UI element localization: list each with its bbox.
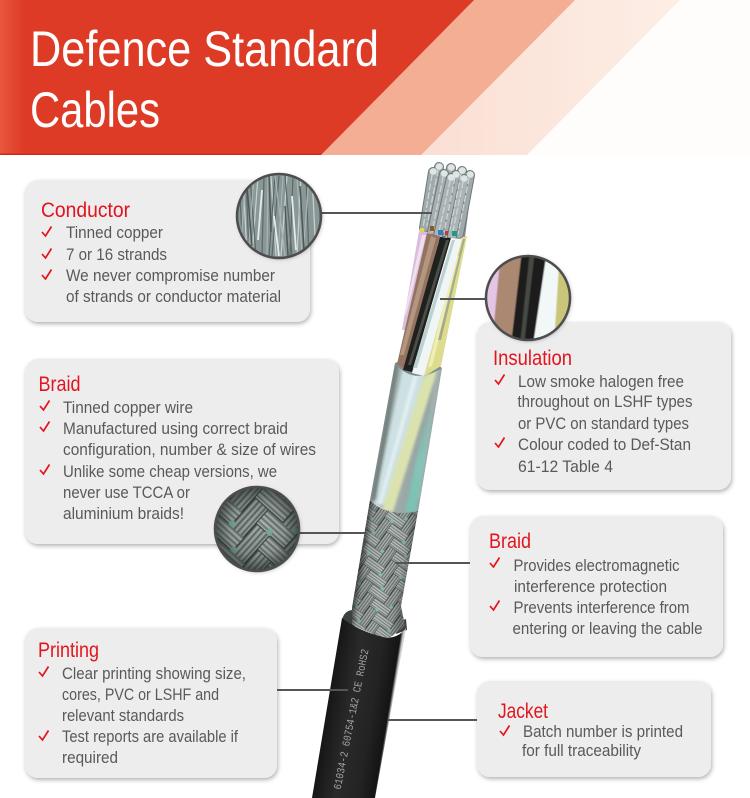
list: conductor points: 7 or 16 strands bbox=[66, 245, 167, 264]
list: printing points: Test reports are available if bbox=[62, 727, 238, 746]
list: braid right points bbox=[490, 556, 702, 638]
cable illustration bbox=[312, 166, 473, 798]
screen foil bbox=[370, 363, 442, 513]
icon: insulation magnifier bbox=[484, 254, 574, 344]
list: insulation points bbox=[495, 372, 692, 476]
heading: braid left: Braid bbox=[38, 373, 80, 396]
cable jacket with printing bbox=[312, 618, 406, 798]
list: braid left points: Tinned copper wire bbox=[63, 398, 193, 417]
list: jacket points bbox=[500, 722, 683, 760]
panel: insulation bbox=[477, 322, 731, 490]
title: Defence Standard bbox=[30, 21, 379, 77]
panel: conductor bbox=[25, 180, 310, 322]
title bbox=[30, 21, 379, 138]
heading: conductor: Conductor bbox=[41, 199, 130, 222]
list: jacket points: Batch number is printed bbox=[523, 722, 683, 741]
back of screen foil bbox=[395, 359, 442, 380]
list: braid left points: configuration, number & size of wires bbox=[63, 440, 316, 459]
list: insulation points: throughout on LSHF types bbox=[518, 392, 692, 411]
list: braid right points: Prevents interference from bbox=[514, 598, 690, 617]
list: conductor points bbox=[42, 223, 281, 306]
header banner bbox=[0, 0, 750, 155]
list: printing points bbox=[39, 664, 246, 767]
list: insulation points: Colour coded to Def-Stan bbox=[518, 435, 691, 454]
panel: jacket bbox=[477, 681, 711, 777]
list: insulation points: Low smoke halogen free bbox=[518, 372, 684, 391]
small coloured core ends bbox=[420, 226, 457, 236]
list: insulation points: or PVC on standard types bbox=[518, 414, 689, 433]
metal braid bbox=[352, 500, 418, 640]
panel: printing bbox=[25, 628, 277, 778]
jacket back rim bbox=[342, 610, 407, 634]
conductor strands bbox=[423, 166, 473, 237]
heading: braid right: Braid bbox=[489, 530, 531, 553]
list: braid left points bbox=[40, 398, 316, 523]
list: insulation points: 61-12 Table 4 bbox=[518, 457, 613, 476]
list: jacket points: for full traceability bbox=[522, 741, 641, 760]
list: braid left points: never use TCCA or bbox=[63, 483, 190, 502]
heading: jacket: Jacket bbox=[498, 700, 548, 723]
icon: braid magnifier bbox=[215, 487, 299, 571]
list: braid right points: entering or leaving the cable bbox=[512, 619, 702, 638]
list: braid right points: Provides electromagnetic bbox=[514, 556, 680, 575]
list: printing points: required bbox=[62, 748, 118, 767]
icon: conductor magnifier bbox=[237, 174, 321, 258]
list: printing points: Clear printing showing size, bbox=[62, 664, 246, 683]
panel: braid right bbox=[470, 516, 723, 657]
list: printing points: relevant standards bbox=[62, 706, 184, 725]
list: braid left points: Unlike some cheap versions, we bbox=[63, 462, 277, 481]
list: braid left points: Manufactured using correct braid bbox=[63, 419, 288, 438]
heading: printing: Printing bbox=[38, 639, 99, 662]
title: Cables bbox=[30, 82, 160, 138]
jacket print: 61034-2 60754-1&2 CE RoHS2 bbox=[333, 648, 372, 791]
list: conductor points: We never compromise number bbox=[66, 266, 275, 285]
list: printing points: cores, PVC or LSHF and bbox=[62, 685, 219, 704]
list: conductor points: of strands or conductor material bbox=[66, 287, 281, 306]
list: conductor points: Tinned copper bbox=[66, 223, 163, 242]
list: braid left points: aluminium braids! bbox=[63, 504, 184, 523]
list: braid right points: interference protection bbox=[514, 577, 667, 596]
panel: braid left bbox=[25, 359, 339, 544]
insulated cores bbox=[397, 231, 467, 378]
leader lines bbox=[277, 213, 486, 720]
heading: insulation: Insulation bbox=[493, 347, 572, 370]
